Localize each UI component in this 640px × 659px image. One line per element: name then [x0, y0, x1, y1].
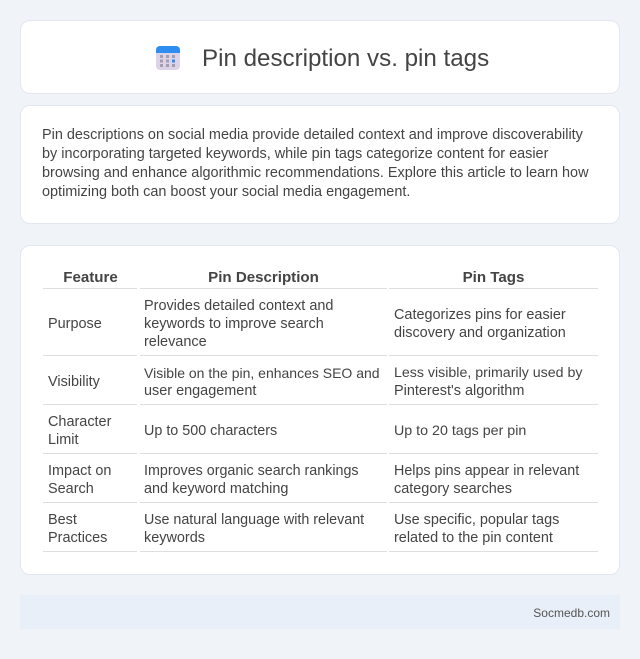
row: Best Practices: related to the pin content	[394, 530, 553, 546]
row: Visibility	[48, 365, 582, 399]
row: Visibility: Pinterest's algorithm	[394, 383, 524, 399]
row: Impact on Search: category searches	[394, 481, 512, 497]
row: Impact on Search	[48, 463, 580, 497]
row: Purpose: Provides detailed context and	[144, 298, 333, 314]
title: Pin description vs. pin tags	[202, 45, 489, 72]
row: Purpose: relevance	[144, 334, 207, 350]
table header: Pin Tags: Pin Tags	[463, 269, 524, 286]
row: Purpose	[48, 298, 566, 350]
panel: header card	[20, 20, 620, 94]
row: Best Practices	[48, 512, 559, 546]
row: Best Practices: keywords	[144, 530, 205, 546]
intro text	[42, 127, 589, 200]
panel: comparison table	[20, 245, 620, 575]
row: Impact on Search: Improves organic search rankings	[144, 463, 359, 479]
icon: calendar	[156, 46, 180, 70]
panel: introduction	[20, 105, 620, 224]
footer source text: Socmedb.com	[533, 606, 610, 620]
row: Purpose: Purpose	[48, 316, 102, 332]
row: Impact on Search: Search	[48, 481, 94, 497]
row: Impact on Search: Impact on	[48, 463, 111, 479]
intro text: optimizing both can boost your social media engagement.	[42, 184, 410, 200]
footer bar	[20, 595, 620, 629]
row: Character Limit: Character	[48, 414, 111, 430]
row: Purpose: discovery and organization	[394, 325, 566, 341]
table header: Pin Description: Pin Description	[208, 269, 319, 286]
row: Purpose: Categorizes pins for easier	[394, 307, 566, 323]
row: Best Practices: Use specific, popular tags	[394, 512, 559, 528]
row: Character Limit	[48, 414, 526, 448]
row: Character Limit: Up to 500 characters	[144, 423, 277, 439]
row: Character Limit: Up to 20 tags per pin	[394, 423, 526, 439]
row: Visibility: Less visible, primarily used by	[394, 365, 582, 381]
intro text: Pin descriptions on social media provide detailed context and improve discoverability	[42, 127, 583, 143]
row: Purpose: keywords to improve search	[144, 316, 324, 332]
row: Visibility: Visible on the pin, enhances SEO and	[144, 365, 380, 381]
row: Best Practices: Best	[48, 512, 77, 528]
row: Visibility: Visibility	[48, 374, 100, 390]
row: Impact on Search: and keyword matching	[144, 481, 288, 497]
row: Character Limit: Limit	[48, 432, 78, 448]
intro text: by incorporating targeted keywords, while pin tags categorize content for easier	[42, 146, 548, 162]
row: Best Practices: Practices	[48, 530, 107, 546]
table header: Feature: Feature	[63, 269, 118, 286]
intro text: browsing and enhance algorithmic recommendations. Explore this article to learn how	[42, 165, 589, 181]
row: Best Practices: Use natural language with relevant	[144, 512, 364, 528]
row: Impact on Search: Helps pins appear in relevant	[394, 463, 579, 479]
row: Visibility: user engagement	[144, 383, 256, 399]
